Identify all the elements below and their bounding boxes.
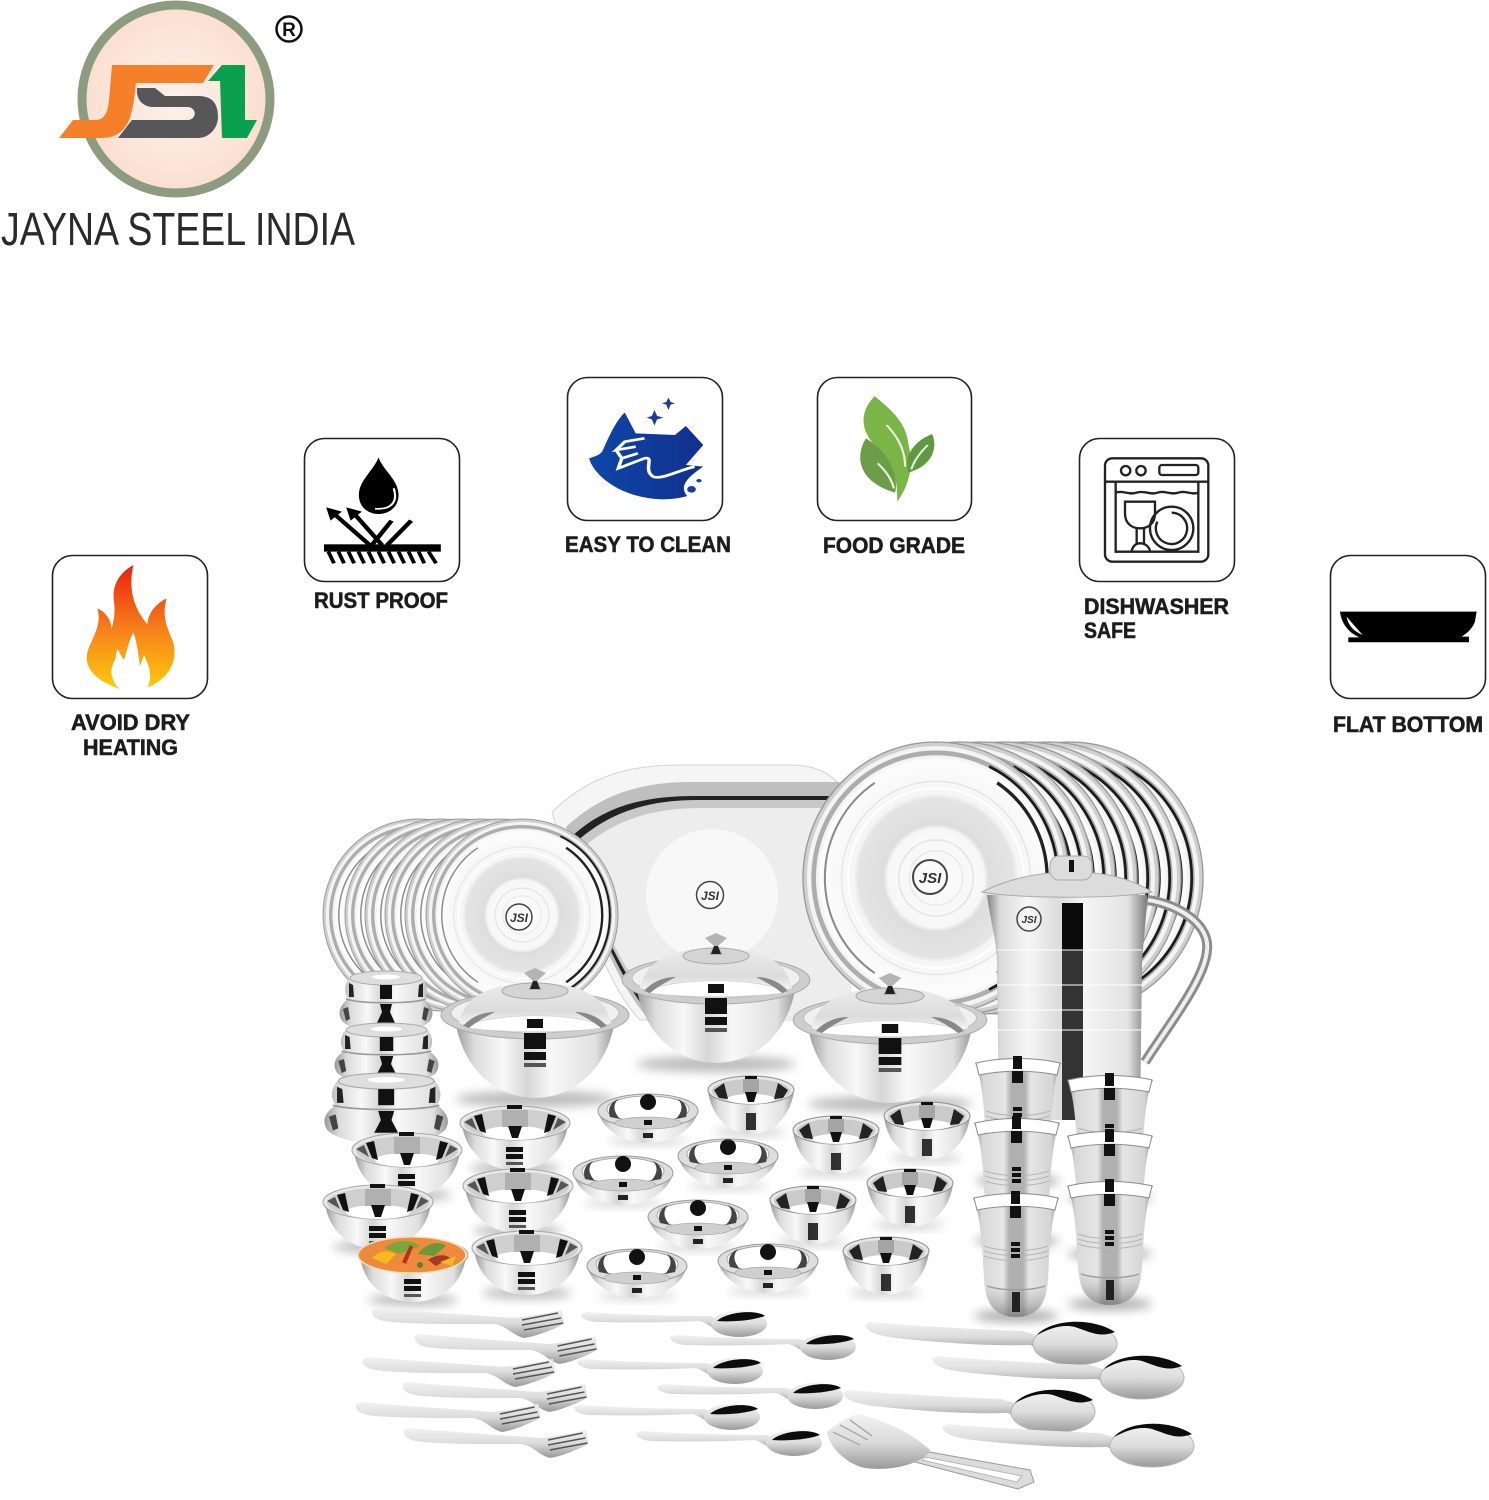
label: SAFE [1084,618,1136,643]
badge: food grade [818,378,972,558]
badge: flat bottom [1330,556,1486,737]
logo letter S [118,88,218,138]
tray [552,765,850,1020]
icon: leaves [860,396,934,502]
water jug: JSI [1021,915,1037,926]
card [1330,556,1486,698]
logo letter J [59,65,214,138]
casseroles with lids [441,933,987,1112]
registered mark: R [282,20,296,41]
badge: dishwasher safe [1080,438,1234,643]
label: FOOD GRADE [823,533,965,558]
card [52,556,208,698]
tray: JSI [701,889,720,903]
label [71,710,190,760]
icon: drop and deflected arrows [324,457,441,563]
label [1084,594,1229,643]
small bowls [708,1076,970,1297]
card [568,378,722,520]
logo: Jayna Steel India [1,5,355,255]
large plates stack: JSI [919,870,942,887]
large plates stack [803,742,1203,1014]
small spoons [574,1311,856,1456]
tumblers [973,1056,1153,1322]
badge: avoid dry heating [52,556,208,760]
forks [356,1308,597,1458]
badge: rust proof [304,438,460,613]
logo circle [82,5,270,193]
label: AVOID DRY [71,710,190,735]
card [818,378,972,520]
shallow dishes [573,1094,818,1300]
badge: easy to clean [565,378,731,557]
stacked lidded pots [324,971,448,1143]
icon: flame [87,565,175,689]
small plates stack [323,819,618,1011]
logo numeral 1 [208,65,257,138]
label: FLAT BOTTOM [1333,712,1483,737]
label: RUST PROOF [314,588,448,613]
icon: flat bowl [1340,612,1477,642]
serving fork [827,1414,1034,1489]
deep bowls [323,1105,582,1306]
brand name: JAYNA STEEL INDIA [1,203,355,255]
label: DISHWASHER [1084,594,1229,619]
small plates stack: JSI [510,911,529,925]
card [1080,438,1234,582]
water jug [982,856,1207,1120]
card [304,438,460,582]
label: EASY TO CLEAN [565,532,731,557]
product: dinner set [323,742,1207,1489]
registered mark [276,16,302,42]
large serving spoons [843,1322,1194,1467]
food bowl contents [358,1237,466,1273]
icon: dishwasher [1105,458,1208,562]
label: HEATING [83,735,178,760]
icon: hand wiping [589,398,703,499]
